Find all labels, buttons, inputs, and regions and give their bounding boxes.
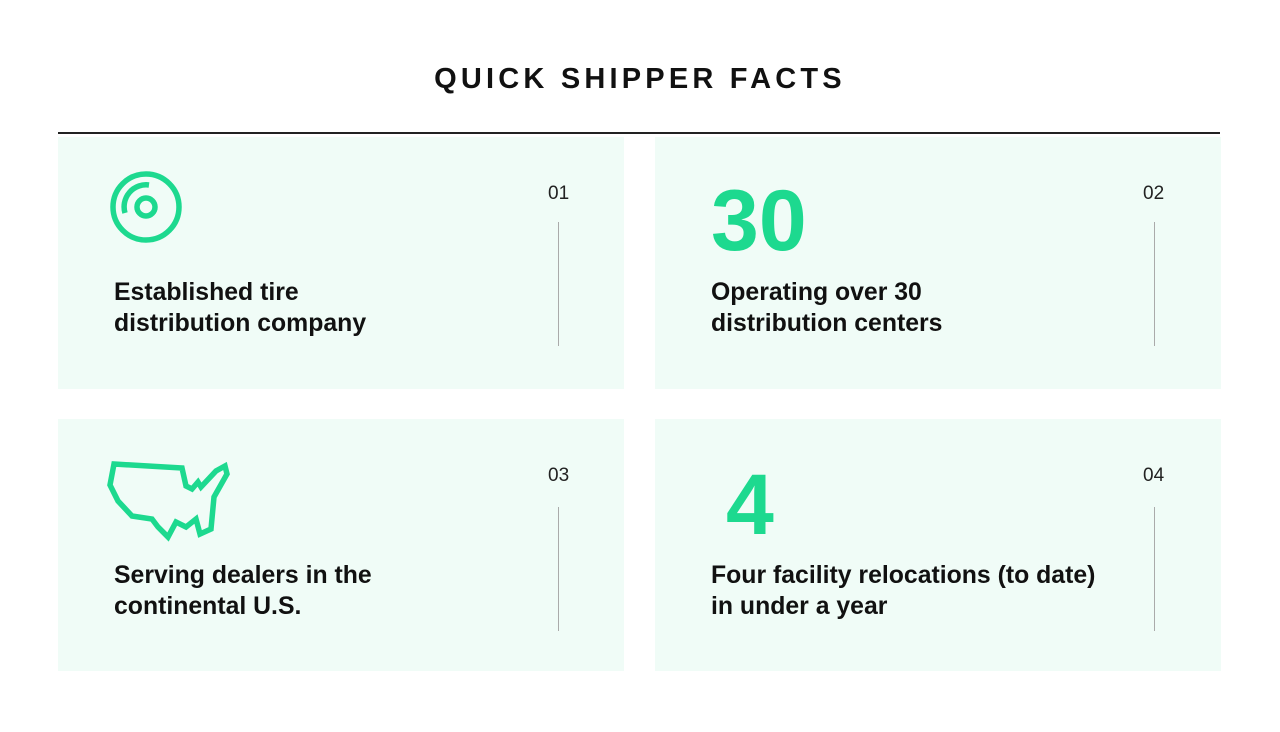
number 02: 02 [1143,183,1164,204]
icon: US map [107,461,230,542]
text [114,279,366,337]
title: QUICK SHIPPER FACTS [434,63,846,95]
text: Established tire [114,279,299,306]
text: distribution company [114,310,366,337]
text: distribution centers [711,310,942,337]
big number 4: 4 [726,457,774,553]
text: Four facility relocations (to date) [711,562,1095,589]
panel: 04 relocations [655,419,1221,671]
number 03: 03 [548,465,569,486]
panel: 03 continental US [58,419,624,671]
panel: 02 distribution centers [655,137,1221,389]
text [711,279,942,337]
text: in under a year [711,593,887,620]
panel: 01 tire distribution [58,137,624,389]
text [114,562,372,620]
number 04: 04 [1143,465,1164,486]
big number 30: 30 [711,173,807,269]
text: Serving dealers in the [114,562,372,589]
icon: tire [110,171,182,243]
number 01: 01 [548,183,569,204]
text: continental U.S. [114,593,301,620]
text [711,562,1095,620]
text: Operating over 30 [711,279,922,306]
